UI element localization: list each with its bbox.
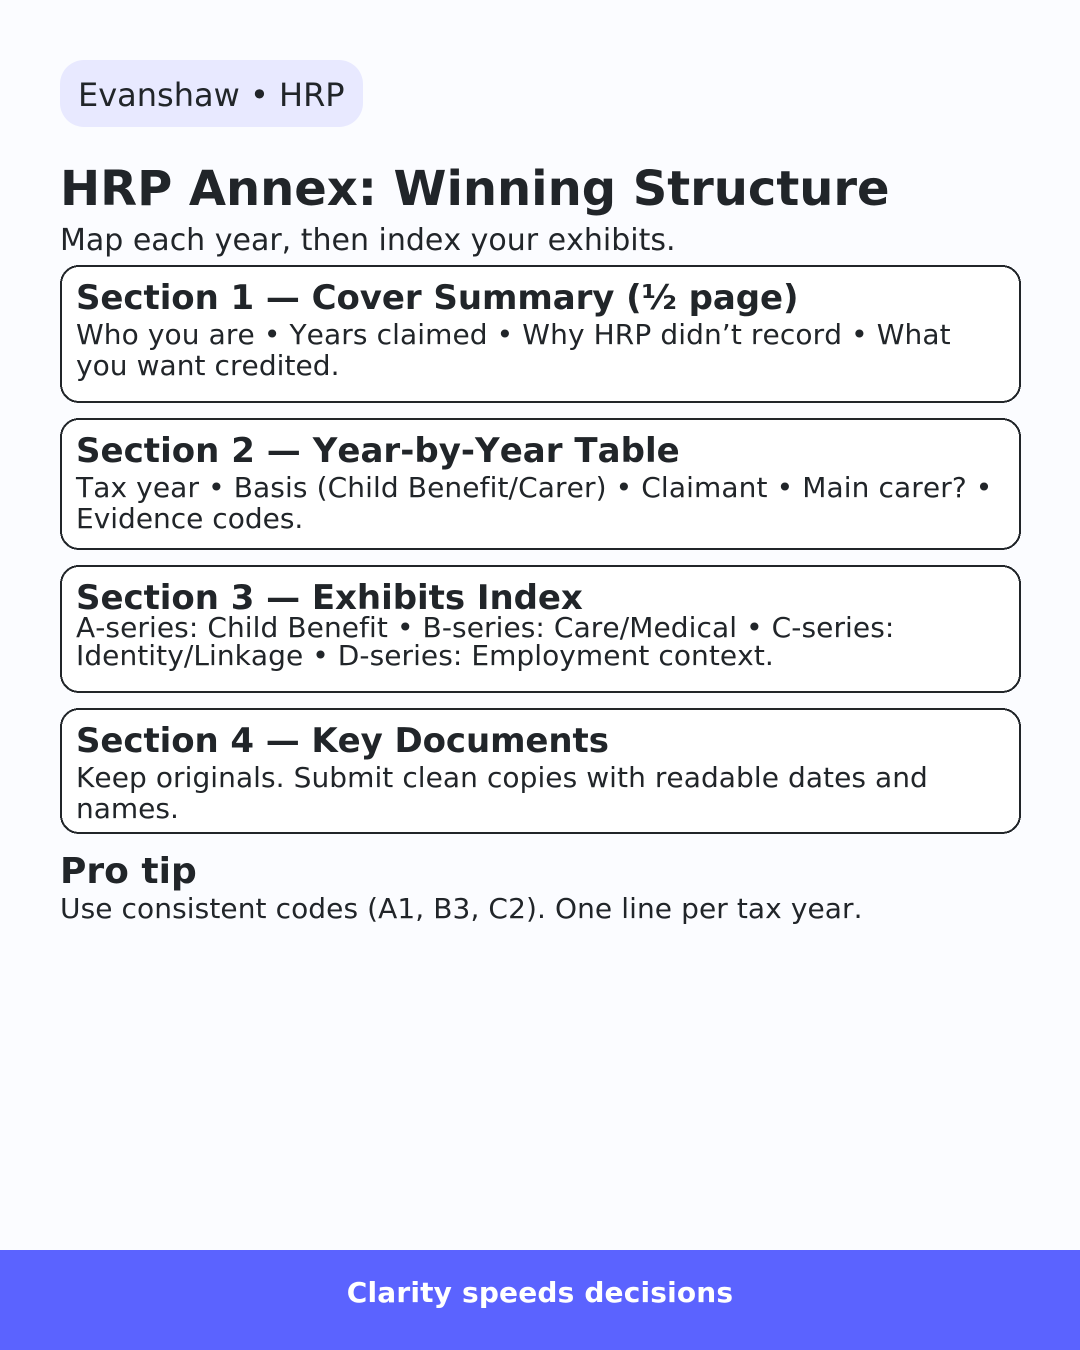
- text: pro tip: Use consistent codes (A1, B3, C2). One line per tax year.: [60, 892, 863, 925]
- text: section 1: you want credited.: [76, 349, 340, 382]
- text: section 3: A-series: Child Benefit • B-series: Care/Medical • C-series:: [76, 611, 894, 644]
- heading: section 3: Section 3 — Exhibits Index: [76, 578, 583, 618]
- subtitle: Map each year, then index your exhibits.: [60, 223, 676, 258]
- title: HRP Annex: Winning Structure: [60, 161, 890, 217]
- badge: [60, 60, 363, 127]
- text: section 3: [76, 611, 894, 672]
- text: section 4: [76, 761, 928, 825]
- text: section 3: Identity/Linkage • D-series: Employment context.: [76, 639, 774, 672]
- text: section 4: Keep originals. Submit clean copies with readable dates and: [76, 761, 928, 794]
- text: section 1: [76, 318, 951, 382]
- heading: section 4: Section 4 — Key Documents: [76, 721, 609, 761]
- panel: section 1: [60, 265, 1021, 403]
- panel: section 3: [60, 565, 1021, 693]
- heading: pro tip: Pro tip: [60, 851, 197, 892]
- heading: section 1: Section 1 — Cover Summary (½ page): [76, 278, 798, 318]
- text: section 2: Evidence codes.: [76, 502, 303, 535]
- text: section 2: [76, 471, 992, 535]
- panel: section 2: [60, 418, 1021, 550]
- footer banner: Clarity speeds decisions: [347, 1276, 733, 1309]
- panel: section 4: [60, 708, 1021, 834]
- text: section 4: names.: [76, 792, 179, 825]
- badge: Evanshaw • HRP: [78, 76, 345, 114]
- heading: section 2: Section 2 — Year-by-Year Table: [76, 431, 680, 471]
- footer banner: [0, 1250, 1080, 1350]
- text: section 2: Tax year • Basis (Child Benefit/Carer) • Claimant • Main carer? •: [76, 471, 992, 504]
- text: section 1: Who you are • Years claimed • Why HRP didn’t record • What: [76, 318, 951, 351]
